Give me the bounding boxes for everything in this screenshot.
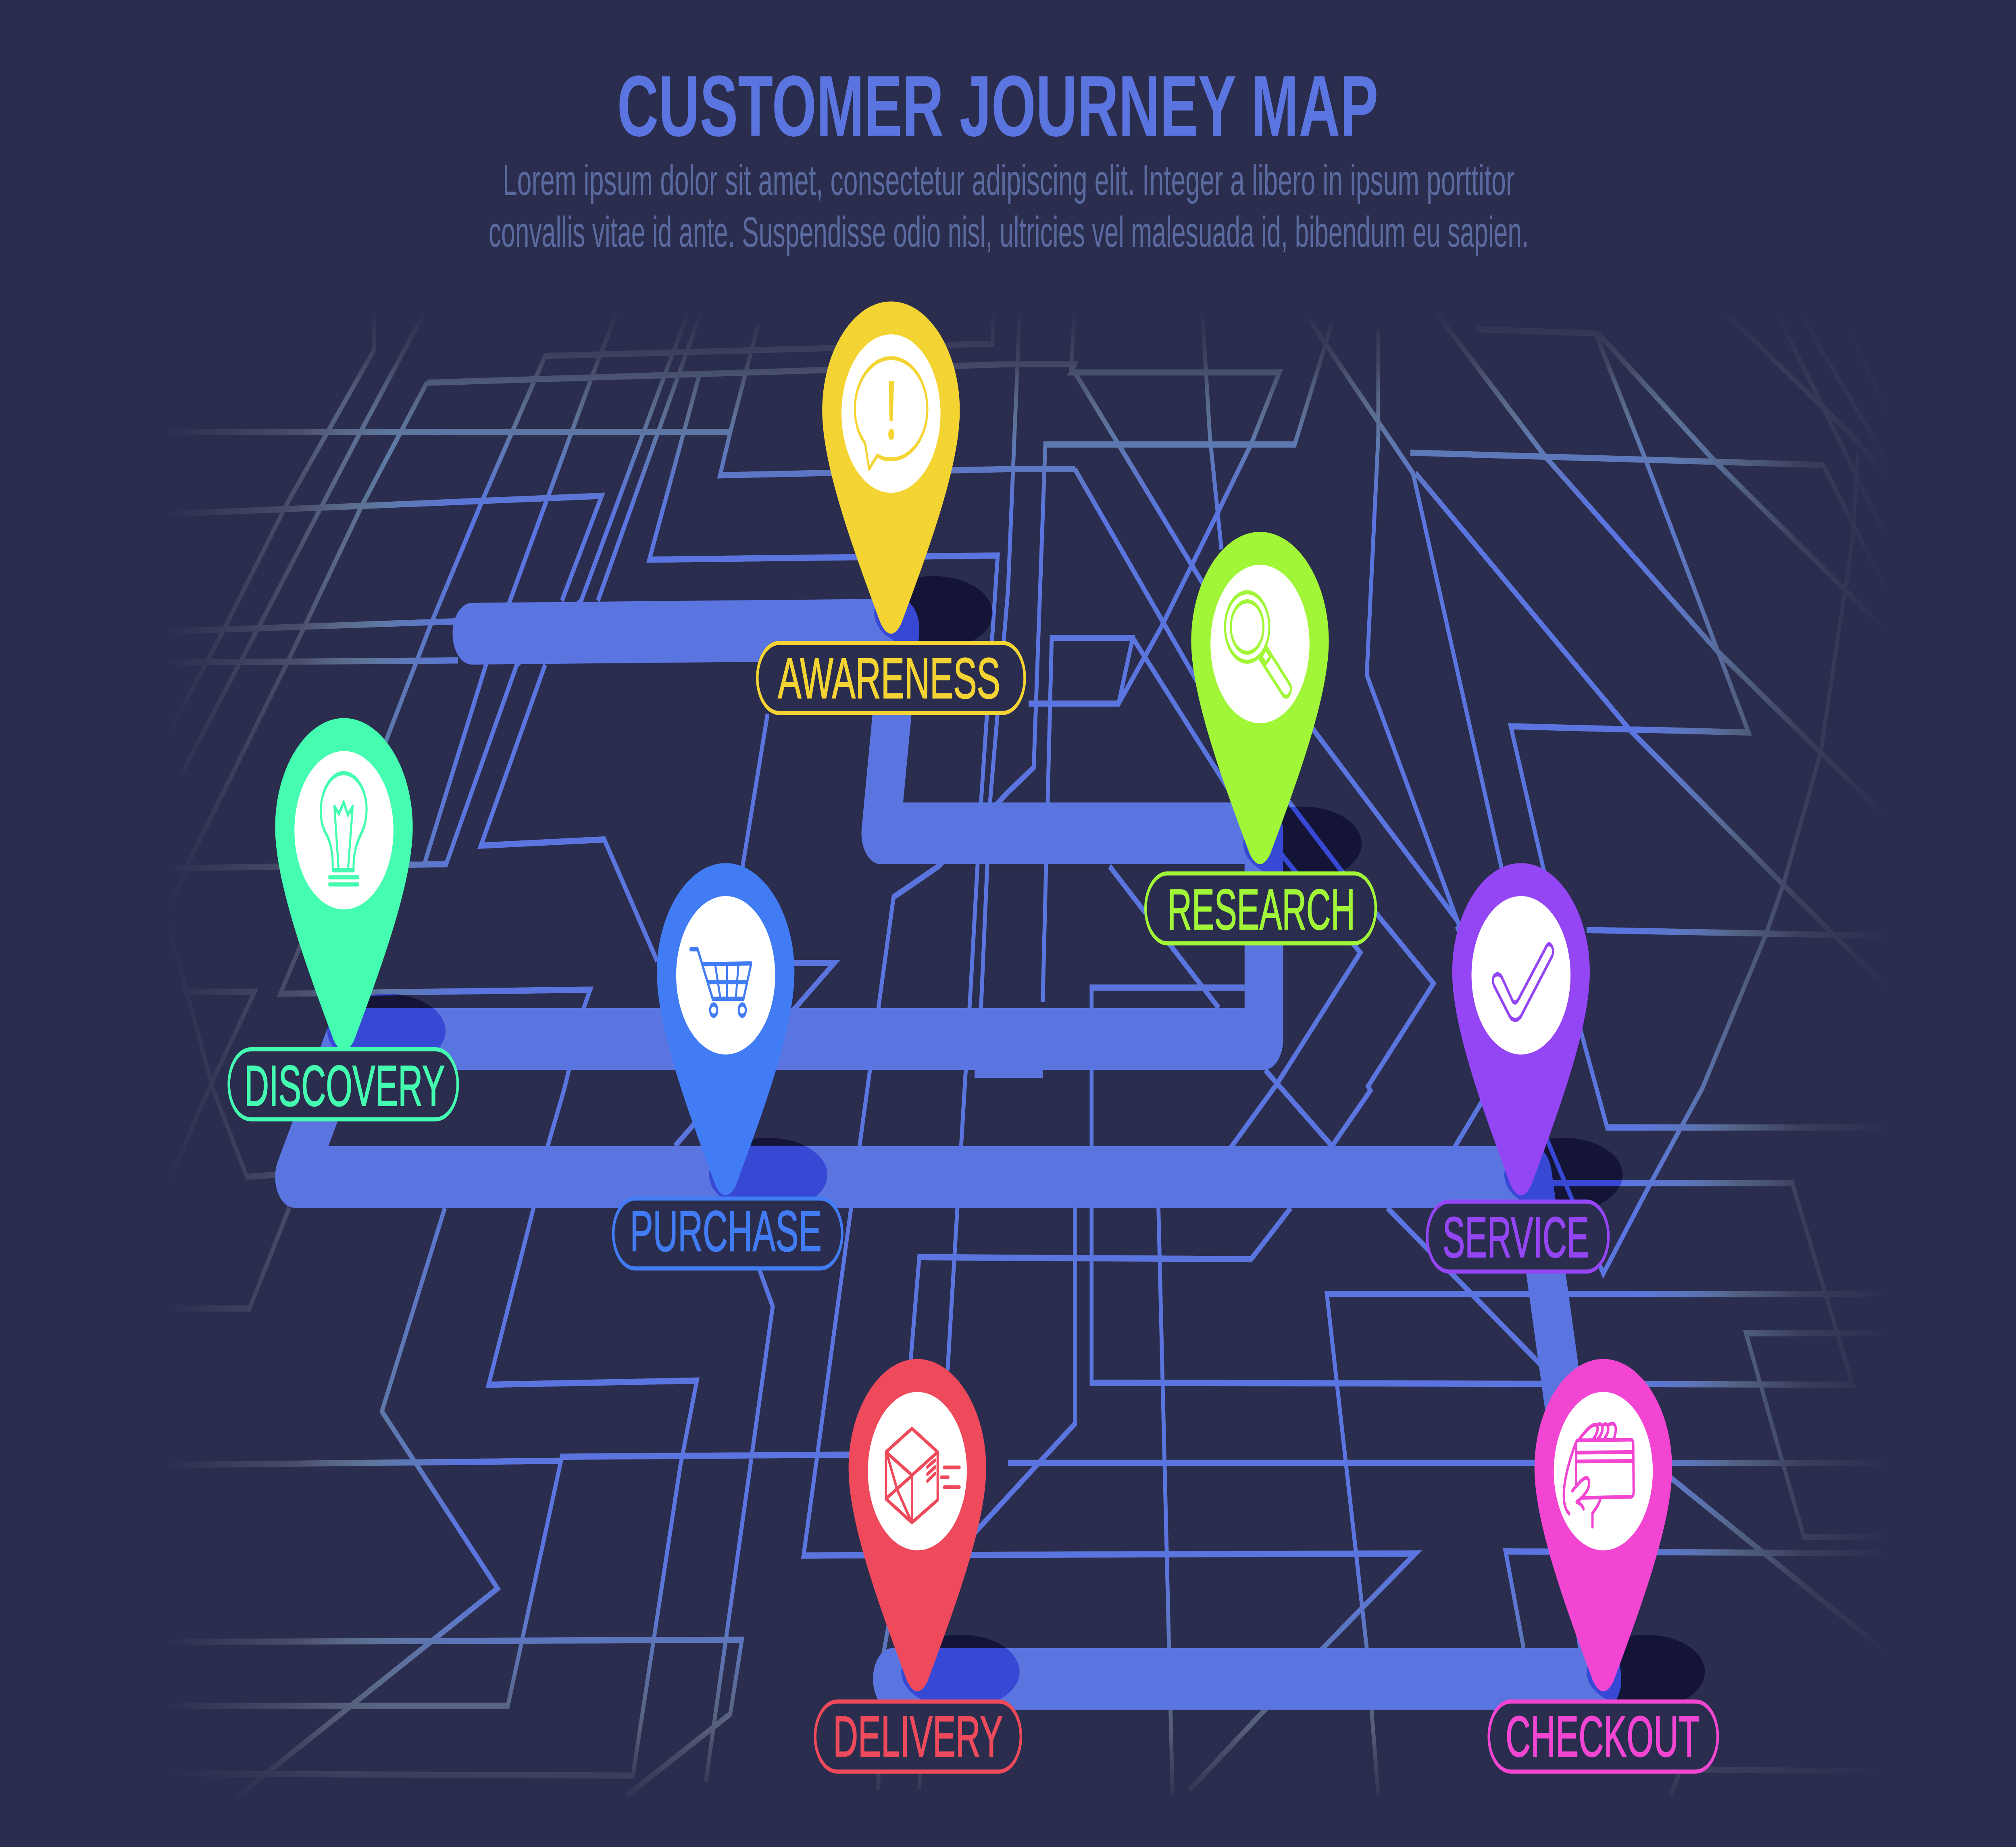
label: service: SERVICE [1443, 1205, 1589, 1270]
icon: light bulb [321, 773, 367, 884]
label: purchase: PURCHASE [630, 1199, 822, 1263]
pin: research [1191, 532, 1329, 864]
label: research: RESEARCH [1167, 878, 1355, 942]
pin: purchase [657, 863, 794, 1195]
pin shadows [327, 576, 1705, 1709]
title: CUSTOMER JOURNEY MAP [617, 57, 1378, 154]
icon: speech bubble with exclamation [855, 358, 927, 469]
icon: check mark [1493, 944, 1553, 1020]
icon: parcel box [886, 1428, 960, 1523]
icon: magnifying glass [1225, 592, 1291, 697]
label: awareness: AWARENESS [778, 646, 1000, 711]
label: checkout: CHECKOUT [1506, 1705, 1700, 1769]
pin: awareness [822, 301, 960, 634]
subtitle text: convallis vitae id ante. Suspendisse odio nisl, ultricies vel malesuada id, bibendum eu sapien. [489, 208, 1529, 256]
subtitle text [489, 156, 1529, 256]
pin: checkout [1535, 1359, 1672, 1691]
label: discovery: DISCOVERY [244, 1054, 445, 1118]
journey route [294, 630, 1602, 1679]
icon: shopping cart [690, 949, 751, 1016]
street map lines [143, 309, 1899, 1796]
pin: discovery [275, 718, 413, 1051]
pin: service [1452, 863, 1590, 1195]
pin: delivery [849, 1359, 986, 1691]
shadow tint on route and streets [327, 602, 1622, 1699]
subtitle text: Lorem ipsum dolor sit amet, consectetur adipiscing elit. Integer a libero in ipsum porttitor [503, 156, 1514, 204]
icon: hand holding credit card [1564, 1424, 1634, 1527]
label: delivery: DELIVERY [833, 1705, 1003, 1769]
